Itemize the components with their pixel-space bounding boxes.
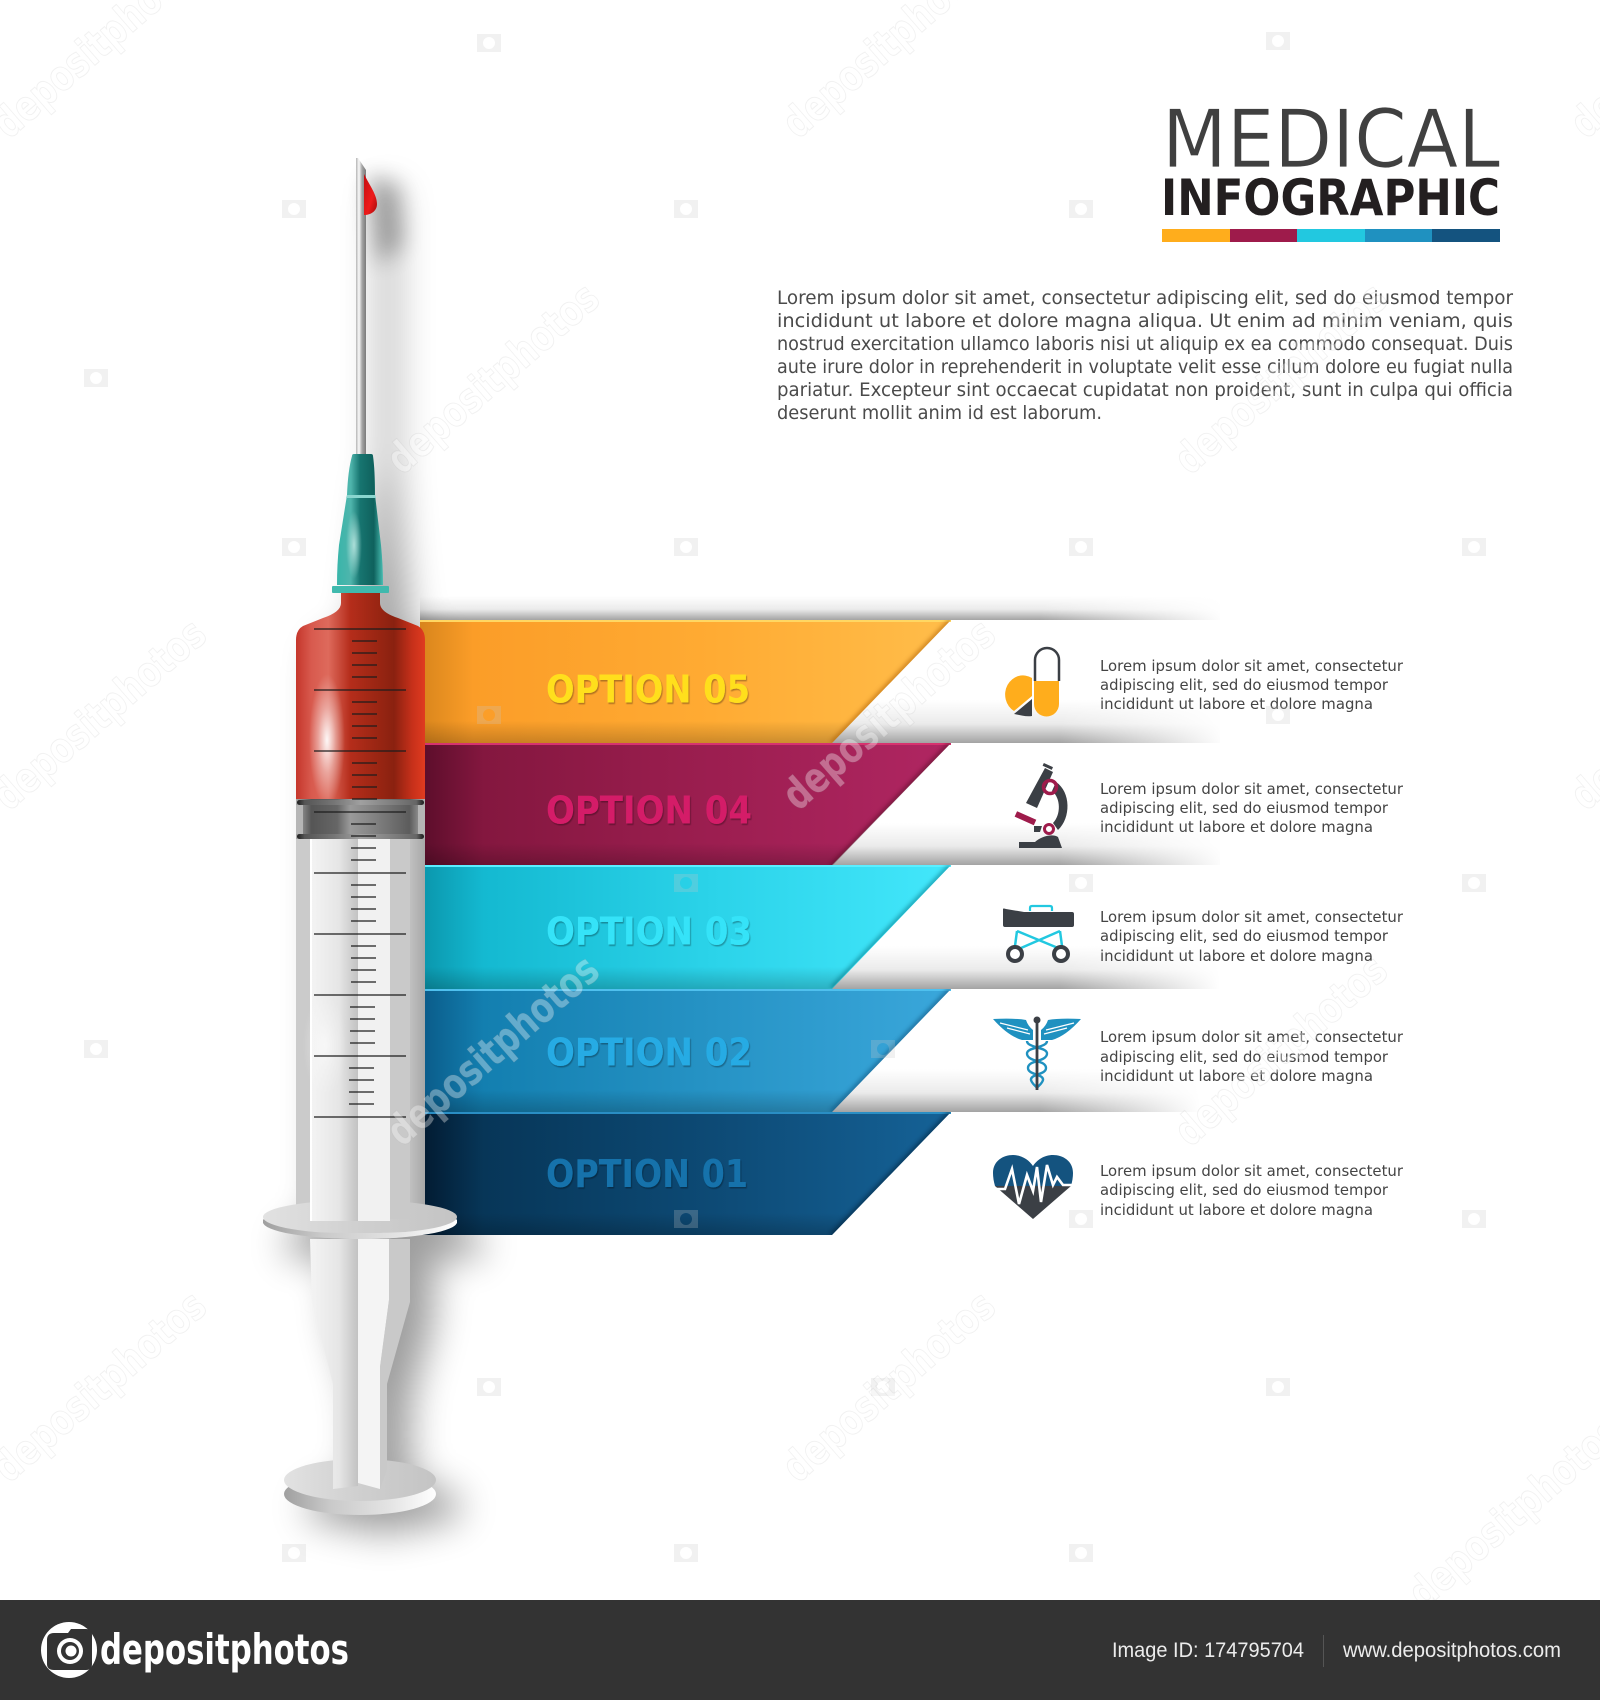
colour bar xyxy=(1162,229,1500,242)
intro paragraph: incididunt ut labore et dolore magna aliqua. Ut enim ad minim veniam, quis xyxy=(777,310,1513,332)
intro paragraph: deserunt mollit anim id est laborum. xyxy=(777,402,1102,424)
watermark text: depositphotos xyxy=(376,945,609,1156)
ribbon: option 03 xyxy=(420,865,951,989)
text: option 03 description xyxy=(1100,908,1404,965)
plunger rod in barrel xyxy=(303,839,410,1221)
text: option 04 description: incididunt ut labore et dolore magna xyxy=(1100,818,1373,836)
ribbon: option 05 xyxy=(420,620,951,743)
icon: microscope xyxy=(1015,763,1068,848)
icon: pill xyxy=(1005,648,1059,716)
ribbon: option 02 xyxy=(420,989,951,1112)
text: option 02 description xyxy=(1100,1028,1404,1085)
title xyxy=(1161,93,1500,242)
icon: stretcher xyxy=(1003,906,1074,961)
watermark text: depositphotos xyxy=(1164,945,1397,1156)
watermark text: depositphotos xyxy=(772,1281,1005,1492)
clear barrel xyxy=(296,839,425,1205)
label: option 04: OPTION 04 xyxy=(546,788,752,832)
scale marks xyxy=(314,629,406,1117)
text: option 01 description: incididunt ut labore et dolore magna xyxy=(1100,1201,1373,1219)
flange front rim xyxy=(263,1219,457,1239)
icon: heart xyxy=(993,1155,1073,1219)
text: option 05 description: Lorem ipsum dolor sit amet, consectetur xyxy=(1100,657,1404,675)
ribbon: option 04 xyxy=(420,743,951,866)
plunger base disc xyxy=(284,1459,436,1515)
shadows of the option rows xyxy=(820,695,1225,1114)
text: option 02 description: Lorem ipsum dolor sit amet, consectetur xyxy=(1100,1028,1404,1046)
intro paragraph: pariatur. Excepteur sint occaecat cupidatat non proident, sunt in culpa qui officia xyxy=(777,379,1513,401)
text: option 03 description: incididunt ut labore et dolore magna xyxy=(1100,947,1373,965)
footer bar xyxy=(0,1600,1600,1700)
needle xyxy=(356,158,366,454)
text: option 01 description xyxy=(1100,1162,1404,1219)
text: option 04 description: Lorem ipsum dolor sit amet, consectetur xyxy=(1100,780,1404,798)
flange xyxy=(263,1200,457,1239)
dark seal band xyxy=(296,799,425,839)
top ribbon shadow xyxy=(420,590,1225,622)
watermark text: depositphotos xyxy=(772,609,1005,820)
icon: logo camera xyxy=(41,1622,97,1678)
syringe drop shadow xyxy=(287,175,481,1534)
text: option 03 description: Lorem ipsum dolor sit amet, consectetur xyxy=(1100,908,1404,926)
red filled chamber xyxy=(296,593,425,799)
watermark cameras xyxy=(84,32,1486,1562)
ribbon: option 01 xyxy=(420,1112,951,1235)
watermark text: depositphotos xyxy=(376,273,609,484)
intro paragraph: Lorem ipsum dolor sit amet, consectetur adipiscing elit, sed do eiusmod tempor xyxy=(777,287,1513,309)
intro paragraph: nostrud exercitation ullamco laboris nisi ut aliquip ex ea commodo consequat. Duis xyxy=(777,333,1513,355)
text: option 04 description: adipiscing elit, sed do eiusmod tempor xyxy=(1100,799,1389,817)
icon: caduceus xyxy=(993,1016,1081,1090)
text: option 05 description: incididunt ut labore et dolore magna xyxy=(1100,695,1373,713)
plunger rod xyxy=(310,1239,410,1489)
intro paragraph: aute irure dolor in reprehenderit in voluptate velit esse cillum dolore eu fugiat nulla xyxy=(777,356,1513,378)
title line two: INFOGRAPHIC xyxy=(1161,169,1500,227)
text: option 02 description: adipiscing elit, sed do eiusmod tempor xyxy=(1100,1048,1389,1066)
needle hub xyxy=(332,454,389,593)
label: option 02: OPTION 02 xyxy=(546,1030,752,1074)
title line one: MEDICAL xyxy=(1162,93,1500,186)
watermark text: depositphotos xyxy=(1164,273,1397,484)
label: option 01: OPTION 01 xyxy=(546,1152,748,1196)
text: option 04 description xyxy=(1100,780,1404,836)
text: option 01 description: Lorem ipsum dolor sit amet, consectetur xyxy=(1100,1162,1404,1180)
logo wordmark: depositphotos xyxy=(100,1625,349,1674)
text: option 01 description: adipiscing elit, sed do eiusmod tempor xyxy=(1100,1181,1389,1199)
text: option 03 description: adipiscing elit, sed do eiusmod tempor xyxy=(1100,927,1389,945)
label: option 05: OPTION 05 xyxy=(546,668,750,712)
text: option 02 description: incididunt ut labore et dolore magna xyxy=(1100,1067,1373,1085)
blood drop xyxy=(364,174,377,215)
intro paragraph xyxy=(777,287,1513,424)
label: option 03: OPTION 03 xyxy=(546,910,752,954)
text: option 05 description xyxy=(1100,657,1404,713)
syringe xyxy=(263,158,457,1515)
text: option 05 description: adipiscing elit, sed do eiusmod tempor xyxy=(1100,676,1389,694)
site url: www.depositphotos.com xyxy=(1342,1639,1561,1662)
image id: Image ID: 174795704 xyxy=(1112,1639,1304,1662)
